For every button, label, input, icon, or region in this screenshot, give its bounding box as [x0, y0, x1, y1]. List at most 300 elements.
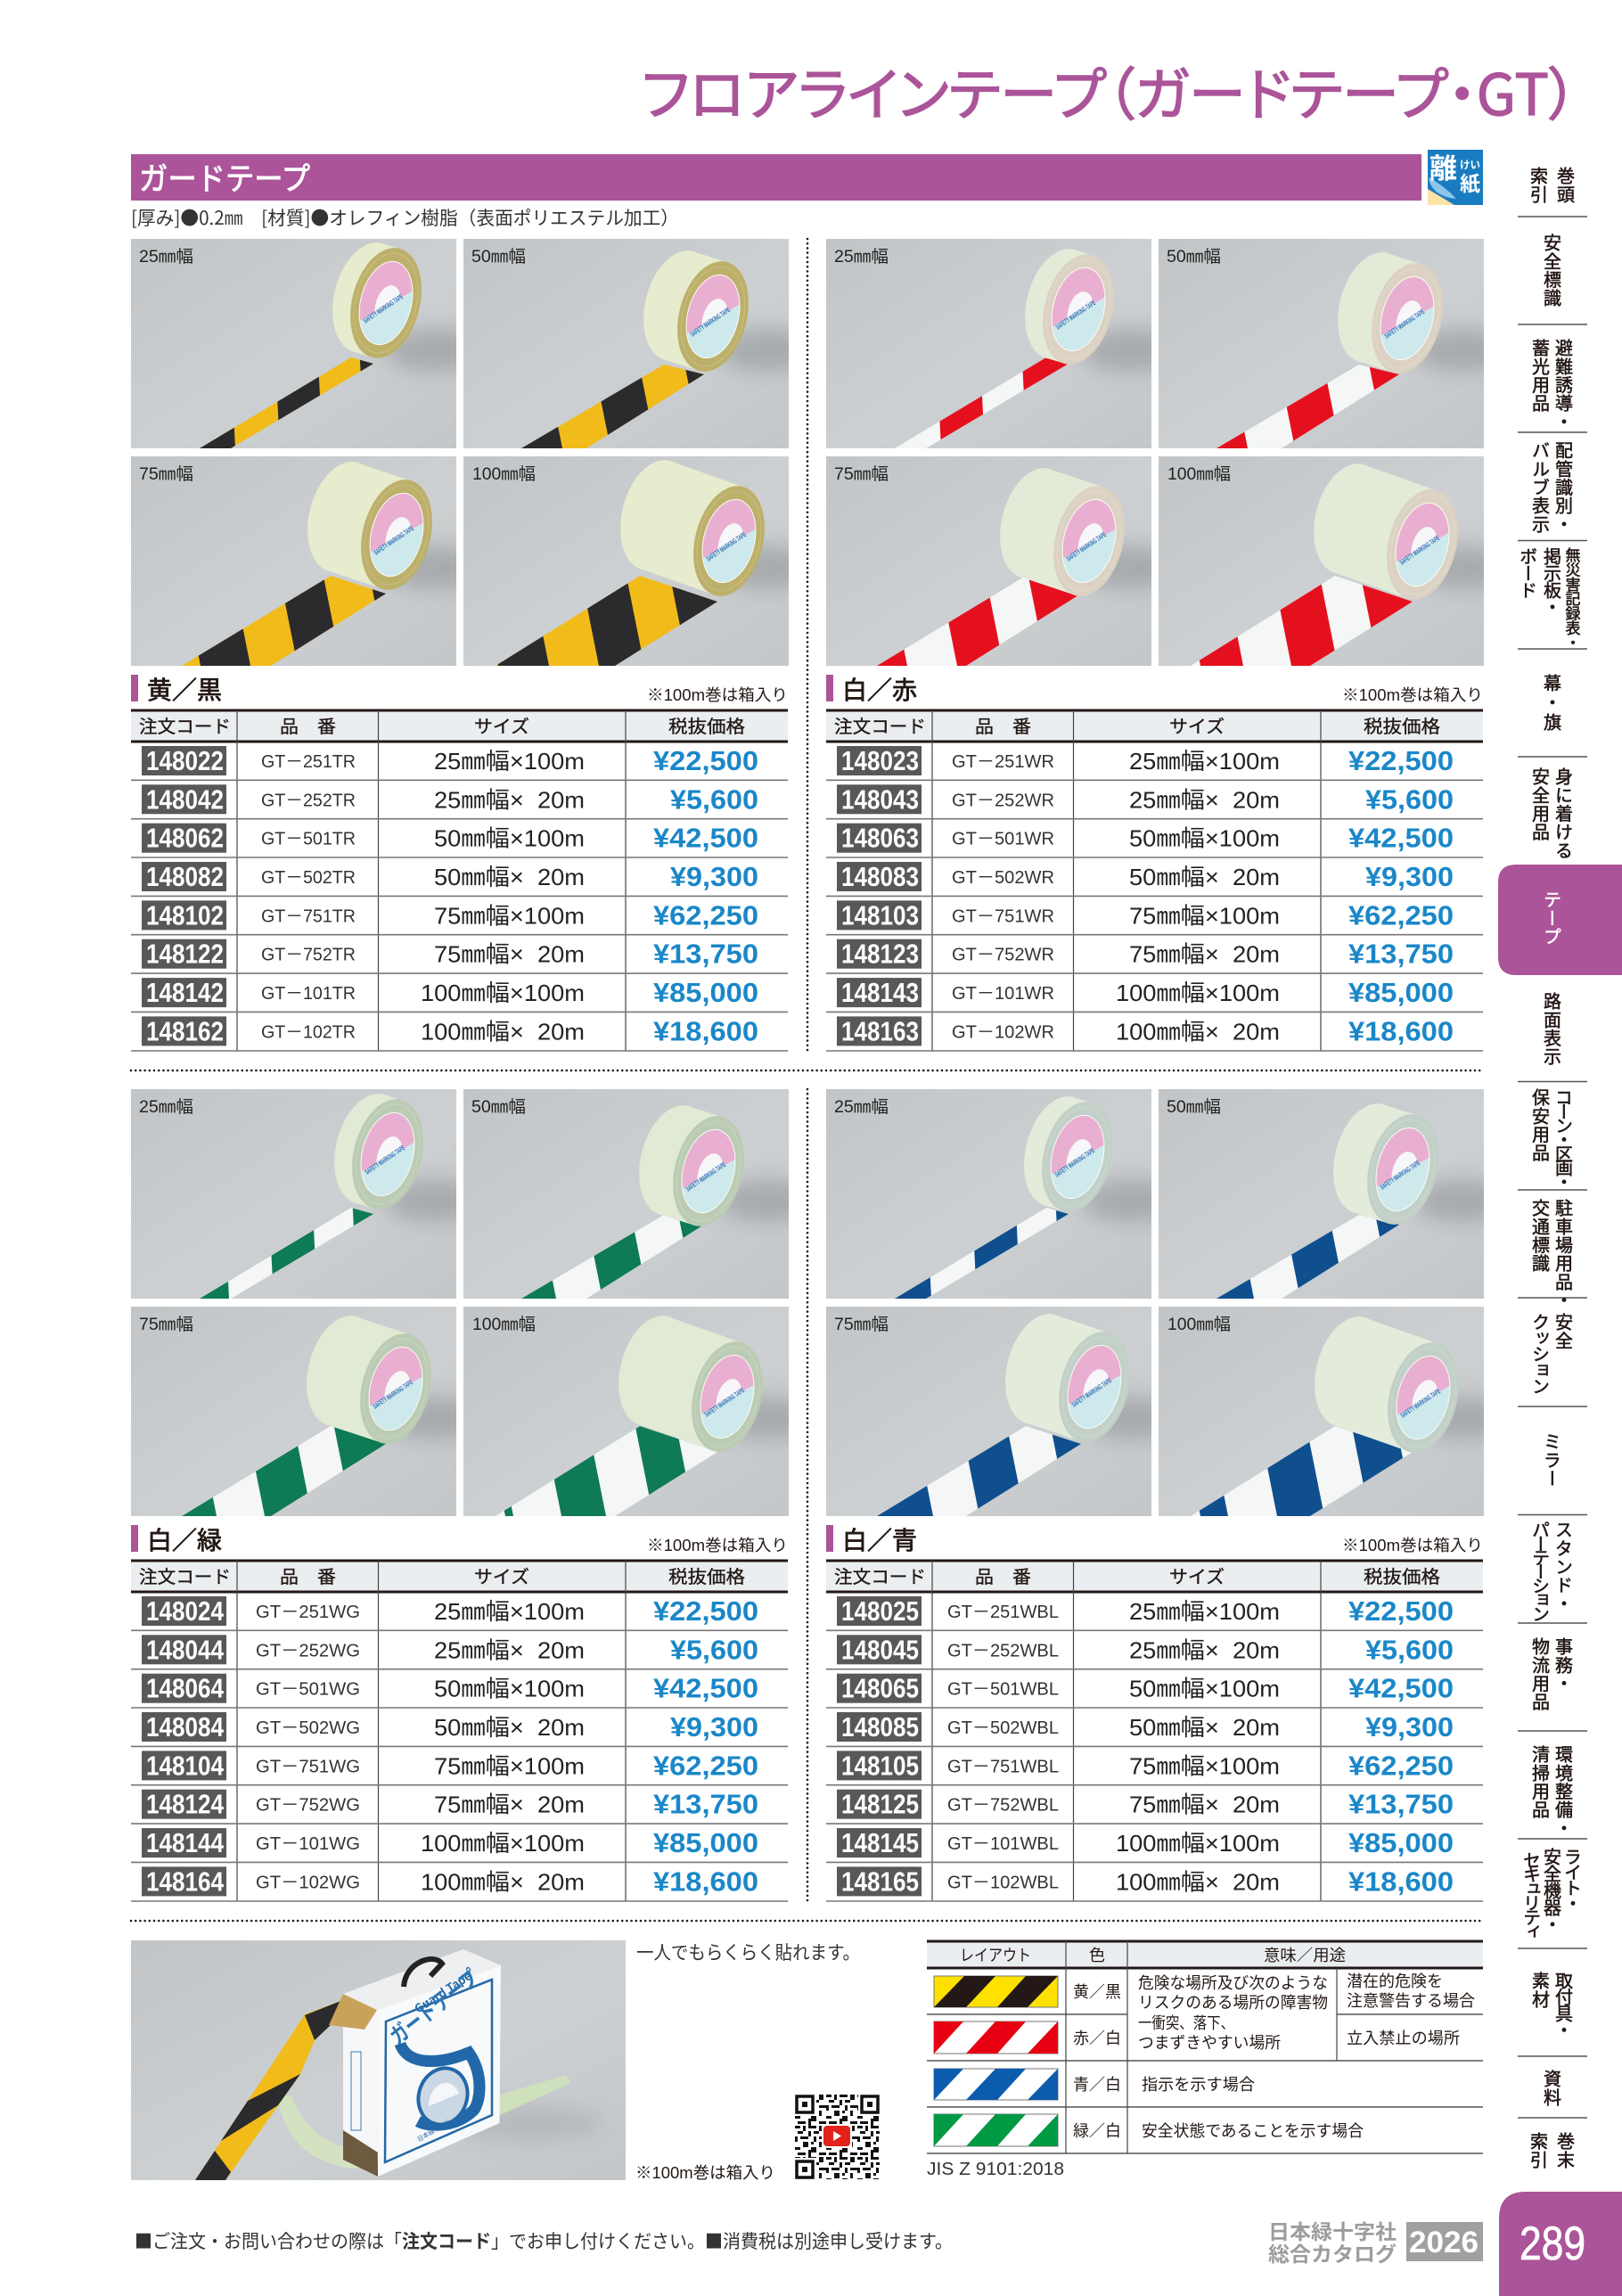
row 148045: 25㎜幅× 20m	[1129, 1636, 1280, 1663]
table header: 税抜価格	[1364, 1562, 1440, 1588]
row 148104: 75㎜幅×100m	[434, 1752, 585, 1779]
legend table: 指示を示す場合	[1142, 2072, 1255, 2095]
section header bar: ガードテープ	[139, 154, 310, 200]
row 148164: 148164	[146, 1866, 225, 1897]
row 148123: 75㎜幅× 20m	[1129, 941, 1280, 968]
row 148045: GT－252WBL	[947, 1641, 1059, 1660]
swatch: green/white	[934, 2114, 1058, 2146]
row 148023	[837, 745, 1454, 776]
tab: 事務・物流用品: 物流用品	[1528, 1637, 1554, 1711]
row 148082: 50㎜幅× 20m	[434, 864, 585, 890]
box note: ※100m巻は箱入り	[635, 2164, 775, 2182]
row 148164: 100㎜幅× 20m	[421, 1868, 585, 1895]
legend table: 赤／白	[1073, 2026, 1121, 2049]
table header: 注文コード	[834, 712, 926, 738]
side navigation tabs	[1498, 167, 1622, 2169]
row 148143: 100㎜幅×100m	[1116, 980, 1280, 1006]
row 148142: ¥85,000	[653, 977, 758, 1008]
row 148122: GT－752TR	[261, 946, 356, 965]
photo: 75mm white/blue: 75㎜幅	[834, 1315, 889, 1334]
table header: 注文コード	[139, 1562, 231, 1588]
row 148163: GT－102WR	[952, 1022, 1054, 1042]
row 148025: GT－251WBL	[947, 1603, 1059, 1622]
swatch: blue/white	[934, 2069, 1058, 2100]
row 148123: 148123	[841, 939, 919, 970]
JIS reference: JIS Z 9101:2018	[927, 2160, 1064, 2179]
row 148065: 148065	[841, 1673, 919, 1704]
row 148045: 148045	[841, 1634, 919, 1665]
tab: 巻末索引: 索引	[1526, 2132, 1552, 2169]
title: フロアラインテープ（ガードテープ・GT）	[642, 50, 1577, 132]
row 148104: ¥62,250	[653, 1750, 758, 1781]
row 148084	[142, 1711, 758, 1742]
color heading: 白／赤	[842, 671, 917, 707]
row 148124: GT－752WG	[256, 1796, 360, 1816]
photo: tape dispenser box: Guard Tape	[411, 1967, 474, 2016]
tab: 駐車場用品・交通標識: 駐車場用品・	[1551, 1199, 1577, 1309]
row 148064: GT－501WG	[256, 1680, 360, 1700]
row 148044: 25㎜幅× 20m	[434, 1636, 585, 1663]
row 148045	[837, 1634, 1454, 1665]
tab: 避難誘導・蓄光用品: 避難誘導・	[1551, 339, 1577, 431]
row 148144: 100㎜幅×100m	[421, 1830, 585, 1857]
row 148084: GT－502WG	[256, 1718, 360, 1738]
tab: コーン・区画・保安用品: コーン・区画・	[1551, 1088, 1577, 1187]
row 148104: GT－751WG	[256, 1757, 360, 1776]
row 148044: GT－252WG	[256, 1641, 360, 1660]
tab: 身に着ける安全用品	[1528, 767, 1577, 859]
row 148144	[142, 1827, 758, 1858]
tab: 身に着ける安全用品: 安全用品	[1528, 767, 1554, 841]
table header	[826, 710, 1483, 1051]
photo: 25mm white/green	[131, 1089, 456, 1299]
row 148143: GT－101WR	[952, 984, 1054, 1004]
photo: 75mm white/red	[826, 456, 1151, 666]
row 148122: 75㎜幅× 20m	[434, 941, 585, 968]
row 148103: 148103	[841, 899, 919, 931]
row 148024	[142, 1595, 758, 1627]
legend table: つまずきやすい場所	[1138, 2030, 1281, 2054]
photo: 75mm white/green	[131, 1307, 456, 1516]
table header	[826, 1561, 1483, 1901]
row 148043: ¥5,600	[1365, 783, 1454, 815]
row 148023: ¥22,500	[1348, 745, 1454, 776]
tab: 安全クッション: クッション	[1528, 1313, 1554, 1393]
row 148103: GT－751WR	[952, 906, 1054, 926]
row 148125: GT－752WBL	[947, 1796, 1059, 1816]
row 148043	[837, 783, 1454, 815]
tab: 取付具・素材: 素材	[1528, 1972, 1554, 2008]
tab: コーン・区画・保安用品	[1528, 1088, 1577, 1187]
legend table	[927, 1941, 1483, 2153]
row 148163: 148163	[841, 1015, 919, 1046]
tab: 避難誘導・蓄光用品: 蓄光用品	[1528, 339, 1554, 413]
row 148023: GT－251WR	[952, 752, 1054, 772]
photo: 50mm white/red: 50㎜幅	[1167, 247, 1221, 266]
row 148063: 50㎜幅×100m	[1129, 825, 1280, 852]
row 148165	[837, 1866, 1454, 1897]
row 148124	[142, 1789, 758, 1820]
row 148043: GT－252WR	[952, 791, 1054, 810]
row 148042: 148042	[146, 783, 224, 815]
photo: 25mm white/red: 25㎜幅	[834, 247, 889, 266]
row 148064: 50㎜幅×100m	[434, 1676, 585, 1702]
row 148062: 148062	[146, 823, 224, 854]
row 148102: ¥62,250	[653, 899, 758, 931]
dotted dividers	[131, 239, 1483, 1921]
row 148143: 148143	[841, 977, 919, 1008]
row 148122: ¥13,750	[653, 939, 758, 970]
row 148024: 25㎜幅×100m	[434, 1598, 585, 1625]
color heading: 黄／黒	[147, 671, 222, 707]
tab: 無災害記録表・掲示板・ボード: ボード	[1515, 547, 1542, 598]
row 148064: ¥42,500	[653, 1673, 758, 1704]
row 148105: 75㎜幅×100m	[1129, 1752, 1280, 1779]
table header: 注文コード	[139, 712, 231, 738]
row 148062: 50㎜幅×100m	[434, 825, 585, 852]
row 148064	[142, 1673, 758, 1704]
row 148163: ¥18,600	[1348, 1015, 1454, 1046]
row 148062: GT－501TR	[261, 830, 356, 849]
tab: ライト・安全機器・セキュリティ: セキュリティ	[1519, 1851, 1545, 1937]
table header: 税抜価格	[1364, 712, 1440, 738]
tab: 環境整備・清掃用品	[1528, 1745, 1577, 1838]
row 148065: 50㎜幅×100m	[1129, 1676, 1280, 1702]
tab: 取付具・素材	[1528, 1972, 1577, 2038]
row 148125: 148125	[841, 1789, 919, 1820]
row 148102: GT－751TR	[261, 906, 356, 926]
row 148144: ¥85,000	[653, 1827, 758, 1858]
legend table: 危険な場所及び次のような	[1138, 1971, 1328, 1994]
row 148083: GT－502WR	[952, 868, 1054, 888]
row 148024: ¥22,500	[653, 1595, 758, 1627]
tab: ライト・安全機器・セキュリティ	[1519, 1848, 1586, 1937]
row 148103: 75㎜幅×100m	[1129, 902, 1280, 929]
row 148123	[837, 939, 1454, 970]
row 148064: 148064	[146, 1673, 225, 1704]
row 148042: 25㎜幅× 20m	[434, 786, 585, 813]
row 148025: ¥22,500	[1348, 1595, 1454, 1627]
tab: スタンド・パーテーション: スタンド・	[1551, 1521, 1577, 1613]
tab: 事務・物流用品	[1528, 1637, 1577, 1711]
row 148103: ¥62,250	[1348, 899, 1454, 931]
table header: 品 番	[280, 1562, 336, 1588]
table header: 税抜価格	[668, 712, 745, 738]
row 148043: 25㎜幅× 20m	[1129, 786, 1280, 813]
panel: white/green	[131, 1086, 862, 1901]
tab: 巻頭索引: 巻頭	[1552, 167, 1579, 203]
photo: 75mm yellow/black: 75㎜幅	[139, 464, 193, 484]
row 148085: ¥9,300	[1365, 1711, 1454, 1742]
boxed note: ※100m巻は箱入り	[647, 686, 788, 704]
row 148142: 148142	[146, 977, 224, 1008]
row 148082	[142, 861, 758, 892]
row 148025: 25㎜幅×100m	[1129, 1598, 1280, 1625]
legend table: 潜在的危険を	[1347, 1969, 1443, 1992]
row 148063: ¥42,500	[1348, 823, 1454, 854]
color heading: 白／緑	[147, 1521, 222, 1557]
row 148164: GT－102WG	[256, 1873, 360, 1892]
row 148144: 148144	[146, 1827, 225, 1858]
row 148102: 148102	[146, 899, 224, 931]
photo: 25mm white/blue	[826, 1089, 1151, 1299]
table header: 税抜価格	[668, 1562, 745, 1588]
catalog name: 日本緑十字社	[1268, 2215, 1397, 2245]
tab: スタンド・パーテーション	[1528, 1521, 1577, 1620]
row 148044: ¥5,600	[670, 1634, 758, 1665]
row 148082: 148082	[146, 861, 224, 892]
table header: 注文コード	[834, 1562, 926, 1588]
color heading: 白／青	[842, 1521, 917, 1557]
row 148104	[142, 1750, 758, 1781]
tab: ミラー: ミラー	[1540, 1432, 1565, 1488]
row 148085: 50㎜幅× 20m	[1129, 1714, 1280, 1741]
row 148165: GT－102WBL	[947, 1873, 1059, 1892]
tab: 路面表示: 路面表示	[1540, 992, 1565, 1066]
photo: 25mm yellow/black: 25㎜幅	[139, 247, 193, 266]
legend table: 注意警告する場合	[1347, 1988, 1475, 2012]
row 148164: ¥18,600	[653, 1866, 758, 1897]
legend table: レイアウト	[960, 1943, 1031, 1966]
photo: 50mm white/blue	[1159, 1089, 1484, 1299]
photo: 50mm yellow/black	[463, 239, 789, 448]
tab: 安全クッション: 安全	[1551, 1313, 1577, 1349]
row 148084: ¥9,300	[670, 1711, 758, 1742]
row 148142: GT－101TR	[261, 984, 356, 1004]
row 148082: GT－502TR	[261, 868, 356, 888]
QR code	[795, 2095, 880, 2179]
row 148062: ¥42,500	[653, 823, 758, 854]
row 148162: 148162	[146, 1015, 224, 1046]
row 148062	[142, 823, 758, 854]
table header: サイズ	[1169, 712, 1225, 738]
row 148023: 148023	[841, 745, 919, 776]
row 148085	[837, 1711, 1454, 1742]
photo: 100mm yellow/black: 100㎜幅	[472, 464, 536, 484]
tab: 環境整備・清掃用品: 環境整備・	[1551, 1745, 1577, 1838]
row 148083	[837, 861, 1454, 892]
row 148022: GT－251TR	[261, 752, 356, 772]
tab: 駐車場用品・交通標識: 交通標識	[1528, 1199, 1554, 1273]
row 148162: ¥18,600	[653, 1015, 758, 1046]
row 148022: ¥22,500	[653, 745, 758, 776]
photo: 50mm white/blue: 50㎜幅	[1167, 1097, 1221, 1117]
section header bar	[131, 154, 1421, 201]
row 148044	[142, 1634, 758, 1665]
row 148044: 148044	[146, 1634, 225, 1665]
photo: tape dispenser box: 日本緑十字社	[415, 2118, 453, 2144]
tab: 無災害記録表・掲示板・ボード: 掲示板・	[1540, 547, 1565, 615]
row 148063: 148063	[841, 823, 919, 854]
tab: 取付具・素材: 取付具・	[1551, 1972, 1577, 2038]
tab: 巻頭索引: 索引	[1526, 167, 1552, 203]
row 148125	[837, 1789, 1454, 1820]
row 148103	[837, 899, 1454, 931]
legend table: リスクのある場所の障害物	[1138, 1990, 1328, 2013]
row 148125: ¥13,750	[1348, 1789, 1454, 1820]
row 148065	[837, 1673, 1454, 1704]
row 148085: 148085	[841, 1711, 919, 1742]
row 148085: GT－502WBL	[947, 1718, 1059, 1738]
row 148063: GT－501WR	[952, 830, 1054, 849]
photo: 100mm white/blue: 100㎜幅	[1167, 1315, 1231, 1334]
table header: サイズ	[474, 1562, 529, 1588]
row 148143: ¥85,000	[1348, 977, 1454, 1008]
tab: コーン・区画・保安用品: 保安用品	[1528, 1088, 1554, 1162]
photo: 50mm white/green: 50㎜幅	[471, 1097, 526, 1117]
legend table: 一衝突、落下、	[1138, 2011, 1234, 2034]
row 148042	[142, 783, 758, 815]
tab: ライト・安全機器・セキュリティ: ライト・	[1560, 1848, 1586, 1910]
footer note: ■ご注文・お問い合わせの際は「注文コード」でお申し付けください。■消費税は別途申し受けます。	[135, 2227, 953, 2254]
catalog name: 総合カタログ	[1268, 2237, 1397, 2267]
row 148122: 148122	[146, 939, 224, 970]
page number tab: 289	[1520, 2218, 1585, 2270]
row 148063	[837, 823, 1454, 854]
photo: 25mm white/green: 25㎜幅	[139, 1097, 193, 1117]
photo: 75mm white/red: 75㎜幅	[834, 464, 889, 484]
row 148105: GT－751WBL	[947, 1757, 1059, 1776]
tab: 身に着ける安全用品: 身に着ける	[1551, 767, 1577, 859]
photo: 100mm white/green	[463, 1307, 815, 1516]
tab: スタンド・パーテーション: パーテーション	[1528, 1521, 1554, 1620]
photo: 75mm white/green: 75㎜幅	[139, 1315, 193, 1334]
row 148084: 148084	[146, 1711, 225, 1742]
row 148102	[142, 899, 758, 931]
table header	[131, 710, 788, 1051]
swatch: red/white	[934, 2021, 1058, 2054]
boxed note: ※100m巻は箱入り	[1342, 686, 1483, 704]
catalog name	[1268, 2215, 1397, 2267]
row 148105: 148105	[841, 1750, 919, 1781]
table header: サイズ	[1169, 1562, 1225, 1588]
row 148142	[142, 977, 758, 1008]
photo: 25mm white/blue: 25㎜幅	[834, 1097, 889, 1117]
row 148024: 148024	[146, 1595, 225, 1627]
tab: 駐車場用品・交通標識	[1528, 1199, 1577, 1309]
photo: 100mm white/green: 100㎜幅	[472, 1315, 536, 1334]
tab: 巻末索引	[1526, 2132, 1579, 2169]
icon: release paper badge: 紙	[1460, 167, 1480, 197]
tab: テープ (current)	[1498, 865, 1622, 975]
legend table: 色	[1089, 1943, 1105, 1966]
row 148083: 148083	[841, 861, 919, 892]
row 148165: 148165	[841, 1866, 919, 1897]
page number tab	[1499, 2192, 1622, 2296]
row 148162	[142, 1015, 758, 1046]
row 148162: GT－102TR	[261, 1022, 356, 1042]
table header: 品 番	[975, 1562, 1031, 1588]
photo: 100mm yellow/black	[463, 456, 789, 666]
spec line: [厚み]●0.2㎜ [材質]●オレフィン樹脂（表面ポリエステル加工）	[131, 204, 679, 231]
photo: 100mm white/red: 100㎜幅	[1167, 464, 1231, 484]
row 148145: 100㎜幅×100m	[1116, 1830, 1280, 1857]
row 148043: 148043	[841, 783, 919, 815]
row 148124: 75㎜幅× 20m	[434, 1792, 585, 1818]
photo: 75mm white/blue	[826, 1307, 1151, 1516]
tab: 安全標識: 安全標識	[1540, 234, 1565, 308]
tab: 環境整備・清掃用品: 清掃用品	[1528, 1745, 1554, 1819]
table header	[131, 1561, 788, 1901]
row 148102: 75㎜幅×100m	[434, 902, 585, 929]
row 148124: ¥13,750	[653, 1789, 758, 1820]
row 148084: 50㎜幅× 20m	[434, 1714, 585, 1741]
photo: 50mm yellow/black: 50㎜幅	[471, 247, 526, 266]
row 148145: 148145	[841, 1827, 919, 1858]
row 148125: 75㎜幅× 20m	[1129, 1792, 1280, 1818]
panel: white/blue	[826, 1089, 1557, 1901]
year badge: 2026	[1409, 2226, 1479, 2259]
row 148045: ¥5,600	[1365, 1634, 1454, 1665]
row 148022	[142, 745, 758, 776]
row 148123: GT－752WR	[952, 946, 1054, 965]
photo: tape dispenser box: ガードテープ	[382, 1961, 485, 2051]
row 148025: 148025	[841, 1595, 919, 1627]
photo: tape dispenser box	[131, 1940, 626, 2180]
row 148025	[837, 1595, 1454, 1627]
tab: 配管識別・バルブ表示: バルブ表示	[1528, 441, 1554, 533]
table header: サイズ	[474, 712, 529, 738]
row 148065: GT－501WBL	[947, 1680, 1059, 1700]
row 148123: ¥13,750	[1348, 939, 1454, 970]
legend table: 黄／黒	[1073, 1980, 1121, 2003]
row 148083: 50㎜幅× 20m	[1129, 864, 1280, 890]
row 148165: ¥18,600	[1348, 1866, 1454, 1897]
tab: 配管識別・バルブ表示	[1528, 441, 1577, 533]
row 148024: GT－251WG	[256, 1603, 360, 1622]
tab: 事務・物流用品: 事務・	[1551, 1637, 1577, 1693]
tab: 巻頭索引	[1526, 167, 1579, 203]
icon: release paper badge: 離	[1429, 146, 1457, 186]
tab: テープ (current): テープ	[1540, 890, 1565, 946]
table header: 品 番	[975, 712, 1031, 738]
row 148122	[142, 939, 758, 970]
tab: 幕・旗: 幕・旗	[1540, 674, 1565, 733]
legend table: 安全状態であることを示す場合	[1142, 2119, 1364, 2142]
row 148023: 25㎜幅×100m	[1129, 748, 1280, 775]
row 148124: 148124	[146, 1789, 225, 1820]
row 148105	[837, 1750, 1454, 1781]
tab: 無災害記録表・掲示板・ボード	[1515, 547, 1585, 650]
row 148082: ¥9,300	[670, 861, 758, 892]
row 148145: ¥85,000	[1348, 1827, 1454, 1858]
row 148042: ¥5,600	[670, 783, 758, 815]
photo: 100mm white/blue	[1159, 1307, 1511, 1516]
tab: ライト・安全機器・セキュリティ: 安全機器・	[1540, 1848, 1565, 1932]
tab: 配管識別・バルブ表示: 配管識別・	[1551, 441, 1577, 533]
photo: 25mm white/red	[826, 239, 1151, 448]
row 148042: GT－252TR	[261, 791, 356, 810]
boxed note: ※100m巻は箱入り	[647, 1537, 788, 1554]
row 148162: 100㎜幅× 20m	[421, 1018, 585, 1045]
boxed note: ※100m巻は箱入り	[1342, 1537, 1483, 1554]
row 148142: 100㎜幅×100m	[421, 980, 585, 1006]
row 148083: ¥9,300	[1365, 861, 1454, 892]
row 148143	[837, 977, 1454, 1008]
table header: 品 番	[280, 712, 336, 738]
legend table: 立入禁止の場所	[1347, 2026, 1460, 2049]
tab: 無災害記録表・掲示板・ボード: 無災害記録表・	[1561, 547, 1585, 650]
icon: release paper badge	[1428, 146, 1483, 205]
tab: 避難誘導・蓄光用品	[1528, 339, 1577, 431]
row 148022: 25㎜幅×100m	[434, 748, 585, 775]
row 148105: ¥62,250	[1348, 1750, 1454, 1781]
tab: 資料: 資料	[1540, 2070, 1565, 2106]
row 148145: GT－101WBL	[947, 1834, 1059, 1854]
icon: release paper badge: けい	[1460, 157, 1480, 172]
row 148022: 148022	[146, 745, 224, 776]
tab: 安全クッション	[1528, 1313, 1577, 1393]
